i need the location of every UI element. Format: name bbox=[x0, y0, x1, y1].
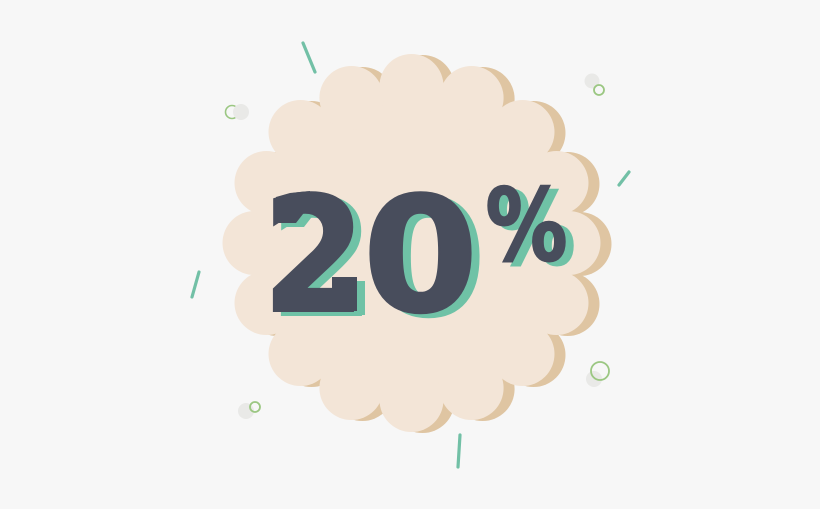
decorative teal dashes bbox=[192, 43, 629, 467]
decorative dots and rings bbox=[226, 74, 609, 419]
main text: 20% bbox=[262, 162, 568, 349]
scalloped badge bbox=[222, 54, 600, 432]
teal text shadow: 20% bbox=[270, 166, 576, 353]
scalloped badge shadow bbox=[234, 55, 612, 433]
